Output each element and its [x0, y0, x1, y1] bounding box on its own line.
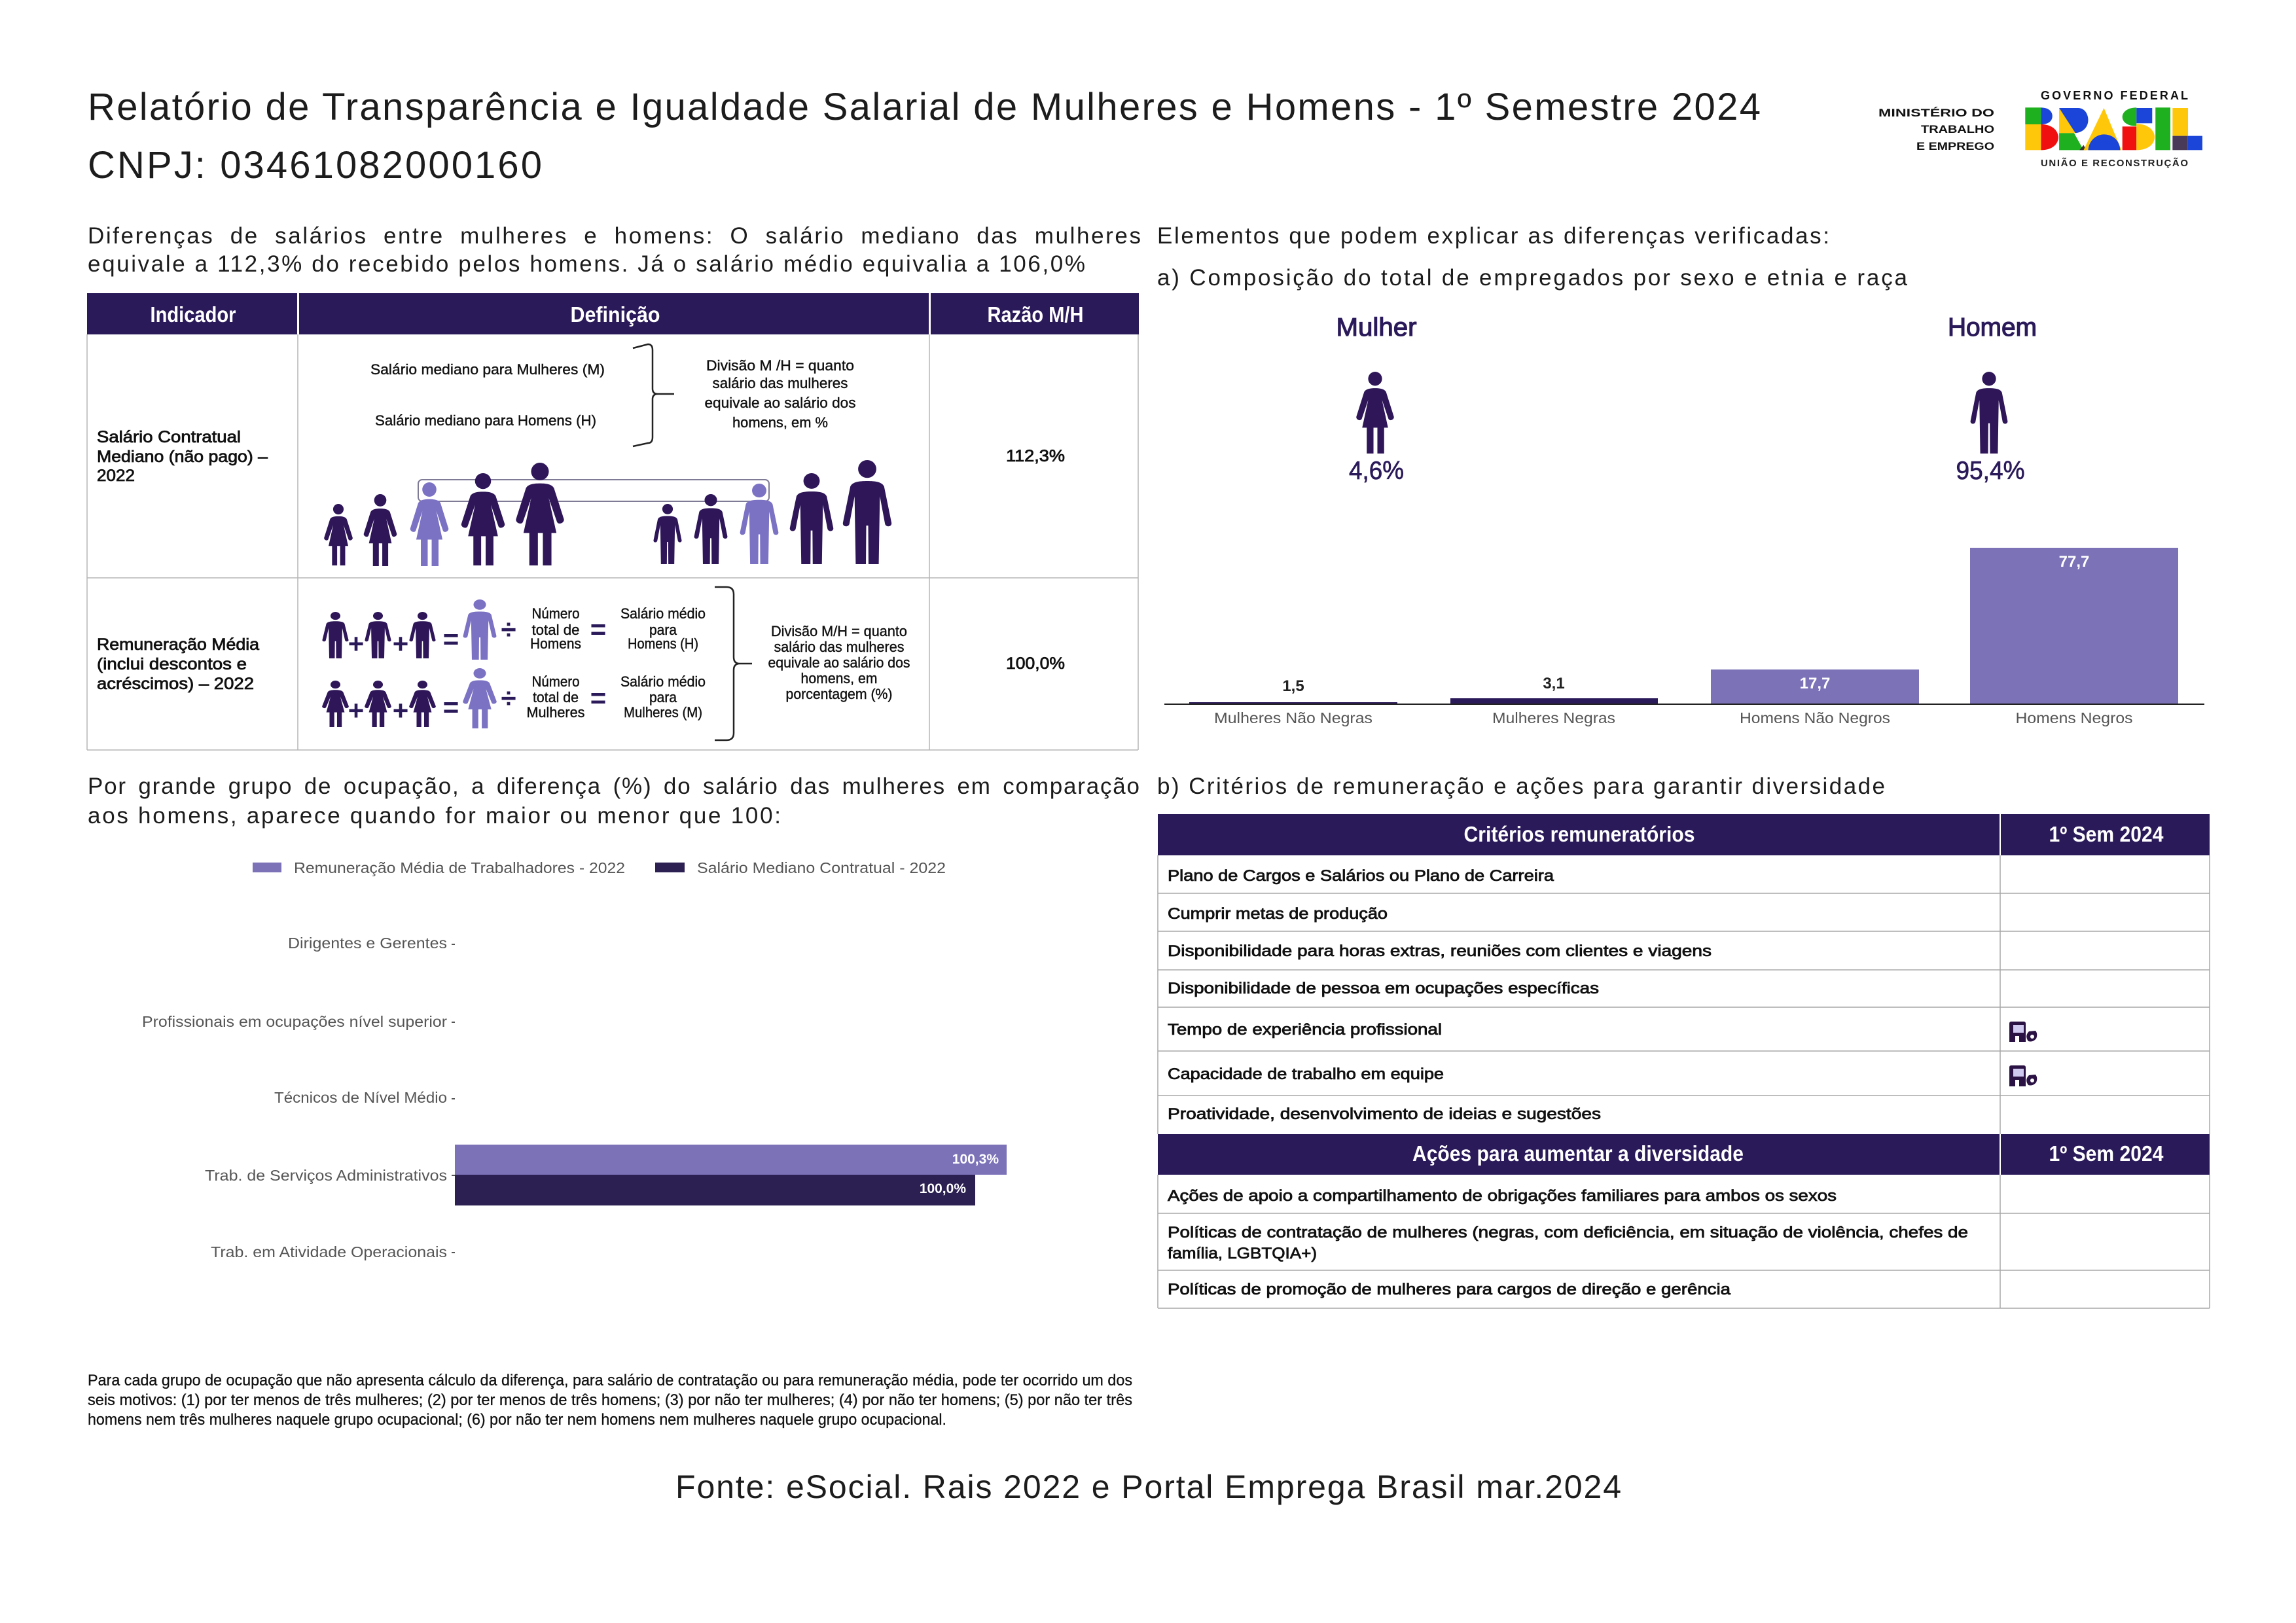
icon: mark experience: [2009, 1022, 2037, 1042]
criteria rows: Disponibilidade para horas extras, reuniões com clientes e viagens: [1168, 942, 1712, 960]
formula: men average: Homens: [530, 635, 581, 652]
formula: women average: +: [393, 695, 408, 726]
text block: salary difference intro: equivale a 112,3% do recebido pelos homens. Já o salário médio equivalia a 106,0%: [88, 251, 1085, 277]
bar chart: race and sex composition: Homens Negros: [2016, 709, 2132, 726]
formula: women average: =: [443, 692, 459, 722]
header: actions: 1º Sem 2024: [2049, 1141, 2164, 1166]
criteria rows: [1168, 867, 1712, 1123]
text block: occupation group: Por grande grupo de ocupação, a diferença (%) do salário das mulheres em comparação: [88, 774, 1139, 799]
average division explanation: salário das mulheres: [774, 639, 905, 655]
header: actions: Ações para aumentar a diversidade: [1412, 1141, 1744, 1166]
heading: remuneration criteria: b) Critérios de remuneração e ações para garantir diversidade: [1157, 774, 1885, 799]
legend: Salário Mediano Contratual - 2022: [697, 859, 946, 876]
table header: Indicador: [151, 302, 236, 327]
median division explanation: Divisão M /H = quanto: [706, 357, 854, 374]
bar chart: race and sex composition: 77,7: [2059, 553, 2089, 571]
legend: Remuneração Média de Trabalhadores - 2022: [294, 859, 625, 876]
median division explanation: salário das mulheres: [712, 375, 848, 391]
brace: median: [633, 344, 674, 446]
bar chart: race and sex composition: 3,1: [1543, 675, 1565, 692]
value: man share: 95,4%: [1956, 457, 2025, 485]
panel: occupation bar chart: [142, 859, 1007, 1260]
icon: mark teamwork: [2009, 1065, 2037, 1086]
formula: women average: Número: [531, 673, 580, 690]
formula: men average: ÷: [501, 614, 516, 645]
formula: men average: =: [590, 614, 606, 645]
row label: average pay: [97, 635, 259, 693]
average division explanation: [768, 623, 910, 702]
ministry name: MINISTÉRIO DO: [1878, 107, 1994, 119]
average division explanation: Divisão M/H = quanto: [771, 623, 907, 639]
average division explanation: homens, em: [801, 670, 877, 687]
header: criteria: Critérios remuneratórios: [1463, 822, 1695, 846]
heading: woman: Mulher: [1336, 313, 1417, 342]
panel: indicator table: [87, 293, 1139, 750]
header: criteria: 1º Sem 2024: [2049, 822, 2164, 846]
row label: median contractual salary: Mediano (não pago) –: [97, 448, 268, 466]
bar chart: race and sex composition: 17,7: [1800, 675, 1830, 692]
formula: women average: Mulheres (M): [624, 704, 702, 721]
ministry name: E EMPREGO: [1916, 140, 1994, 152]
formula: men average: total de: [531, 622, 580, 638]
formula: women average: para: [649, 689, 677, 705]
title: [88, 86, 1761, 187]
value: average ratio: 100,0%: [1006, 654, 1065, 673]
row label: average pay: (inclui descontos e: [97, 655, 247, 673]
footnote: seis motivos: (1) por ter menos de três mulheres; (2) por ter menos de três homens; (3) por não ter mulheres; (4) por não ter homens; (5) por não ter três: [88, 1391, 1132, 1409]
value: median ratio: 112,3%: [1006, 447, 1065, 465]
row label: average pay: acréscimos) – 2022: [97, 675, 254, 693]
axis labels: Trab. de Serviços Administrativos: [205, 1167, 447, 1184]
bars: administrative services: 100,3%: [952, 1152, 999, 1167]
bar chart: race and sex composition: Mulheres Não Negras: [1214, 709, 1372, 726]
table header: Razão M/H: [987, 302, 1084, 327]
footnote: homens nem três mulheres naquele grupo ocupacional; (6) por não ter nem homens nem mulheres naquele grupo ocupacional.: [88, 1411, 946, 1429]
heading: man: Homem: [1948, 313, 2037, 342]
formula: men average: =: [443, 624, 459, 654]
criteria rows: Proatividade, desenvolvimento de ideias e sugestões: [1168, 1105, 1601, 1123]
bar chart: race and sex composition: [1164, 548, 2204, 726]
median definition text: Salário mediano para Mulheres (M): [370, 361, 605, 378]
formula: women average: total de: [533, 689, 579, 705]
row label: median contractual salary: [97, 428, 268, 485]
formula: men average: para: [649, 622, 677, 638]
bars: administrative services: [455, 1145, 1007, 1205]
text block: salary difference intro: [88, 223, 1141, 277]
formula: men average: +: [393, 628, 408, 659]
table header: Definição: [571, 302, 660, 327]
icon: woman: [1356, 372, 1394, 454]
median division explanation: homens, em %: [732, 414, 828, 431]
criteria rows: Disponibilidade de pessoa em ocupações específicas: [1168, 980, 1599, 997]
text block: salary difference intro: Diferenças de salários entre mulheres e homens: O salário mediano das mulheres: [88, 223, 1141, 249]
formula: men average: [322, 599, 706, 660]
action rows: família, LGBTQIA+): [1168, 1245, 1317, 1262]
heading: explanatory elements: a) Composição do total de empregados por sexo e etnia e raça: [1157, 265, 1908, 291]
icons: men by height: [653, 460, 891, 564]
bar chart: race and sex composition: Homens Não Negros: [1740, 709, 1890, 726]
heading: explanatory elements: [1157, 223, 1908, 291]
median definition text: Salário mediano para Homens (H): [375, 412, 596, 429]
axis labels: Trab. em Atividade Operacionais: [211, 1243, 447, 1260]
row label: median contractual salary: Salário Contratual: [97, 428, 241, 446]
legend: [253, 859, 946, 876]
text block: occupation group: [88, 774, 1139, 829]
formula: men average: Homens (H): [628, 635, 698, 652]
header: criteria: [1158, 814, 2210, 855]
action rows: Políticas de promoção de mulheres para cargos de direção e gerência: [1168, 1281, 1731, 1298]
formula: women average: =: [590, 683, 606, 713]
criteria rows: Plano de Cargos e Salários ou Plano de Carreira: [1168, 867, 1554, 885]
formula: men average: +: [348, 628, 364, 659]
heading: explanatory elements: Elementos que podem explicar as diferenças verificadas:: [1157, 223, 1829, 249]
header: actions: [1158, 1134, 2210, 1175]
source: Fonte: eSocial. Rais 2022 e Portal Emprega Brasil mar.2024: [675, 1469, 1621, 1505]
average division explanation: equivale ao salário dos: [768, 654, 910, 671]
brace: average: [715, 587, 752, 740]
row label: median contractual salary: 2022: [97, 467, 135, 485]
formula: men average: Número: [531, 605, 580, 622]
axis labels: Dirigentes e Gerentes: [288, 935, 447, 952]
axis labels: Técnicos de Nível Médio: [274, 1089, 447, 1106]
median definition text: [370, 361, 605, 429]
median bracket frame: [418, 480, 769, 501]
row label: average pay: Remuneração Média: [97, 635, 259, 654]
icons: women by height: [324, 463, 564, 566]
formula: women average: Mulheres: [526, 704, 585, 721]
average division explanation: porcentagem (%): [785, 686, 893, 702]
uniao e reconstrucao label: UNIÃO E RECONSTRUÇÃO: [2041, 157, 2188, 169]
brasil shapes: [2025, 107, 2202, 150]
median division explanation: [704, 357, 856, 431]
table header: [87, 293, 1139, 334]
formula: women average: ÷: [501, 683, 516, 713]
criteria rows: Capacidade de trabalho em equipe: [1168, 1065, 1444, 1083]
ministry name: TRABALHO: [1921, 123, 1994, 135]
title: CNPJ: 03461082000160: [88, 144, 542, 187]
action rows: [1168, 1187, 1968, 1298]
median division explanation: equivale ao salário dos: [704, 395, 856, 411]
bar chart: race and sex composition: 1,5: [1282, 677, 1304, 695]
formula: women average: [322, 668, 706, 728]
action rows: Políticas de contratação de mulheres (negras, com deficiência, em situação de violência, chefes de: [1168, 1224, 1968, 1241]
title: Relatório de Transparência e Igualdade Salarial de Mulheres e Homens - 1º Semestre 2024: [88, 86, 1761, 128]
formula: women average: +: [348, 695, 364, 726]
action rows: Ações de apoio a compartilhamento de obrigações familiares para ambos os sexos: [1168, 1187, 1837, 1205]
bar chart: race and sex composition: Mulheres Negras: [1492, 709, 1615, 726]
formula: women average: Salário médio: [620, 673, 706, 690]
bars: administrative services: 100,0%: [920, 1181, 966, 1196]
logo: ministry and government: [1878, 89, 2202, 169]
formula: men average: Salário médio: [620, 605, 706, 622]
axis labels: [142, 935, 447, 1260]
criteria rows: Cumprir metas de produção: [1168, 905, 1388, 923]
text block: occupation group: aos homens, aparece quando for maior ou menor que 100:: [88, 803, 781, 829]
footnote: Para cada grupo de ocupação que não apresenta cálculo da diferença, para salário de contratação ou para remuneração média, pode ter ocorrido um dos: [88, 1372, 1132, 1389]
governo federal label: GOVERNO FEDERAL: [2041, 89, 2188, 102]
ministry name: [1878, 107, 1994, 152]
value: woman share: 4,6%: [1349, 457, 1404, 485]
icon: man: [1971, 372, 2007, 454]
footnote: [88, 1372, 1132, 1429]
axis labels: Profissionais em ocupações nível superior: [142, 1013, 447, 1030]
criteria rows: Tempo de experiência profissional: [1168, 1021, 1442, 1039]
panel: criteria and actions table: [1158, 814, 2210, 1308]
panel: composition by sex and race: [1164, 313, 2204, 726]
